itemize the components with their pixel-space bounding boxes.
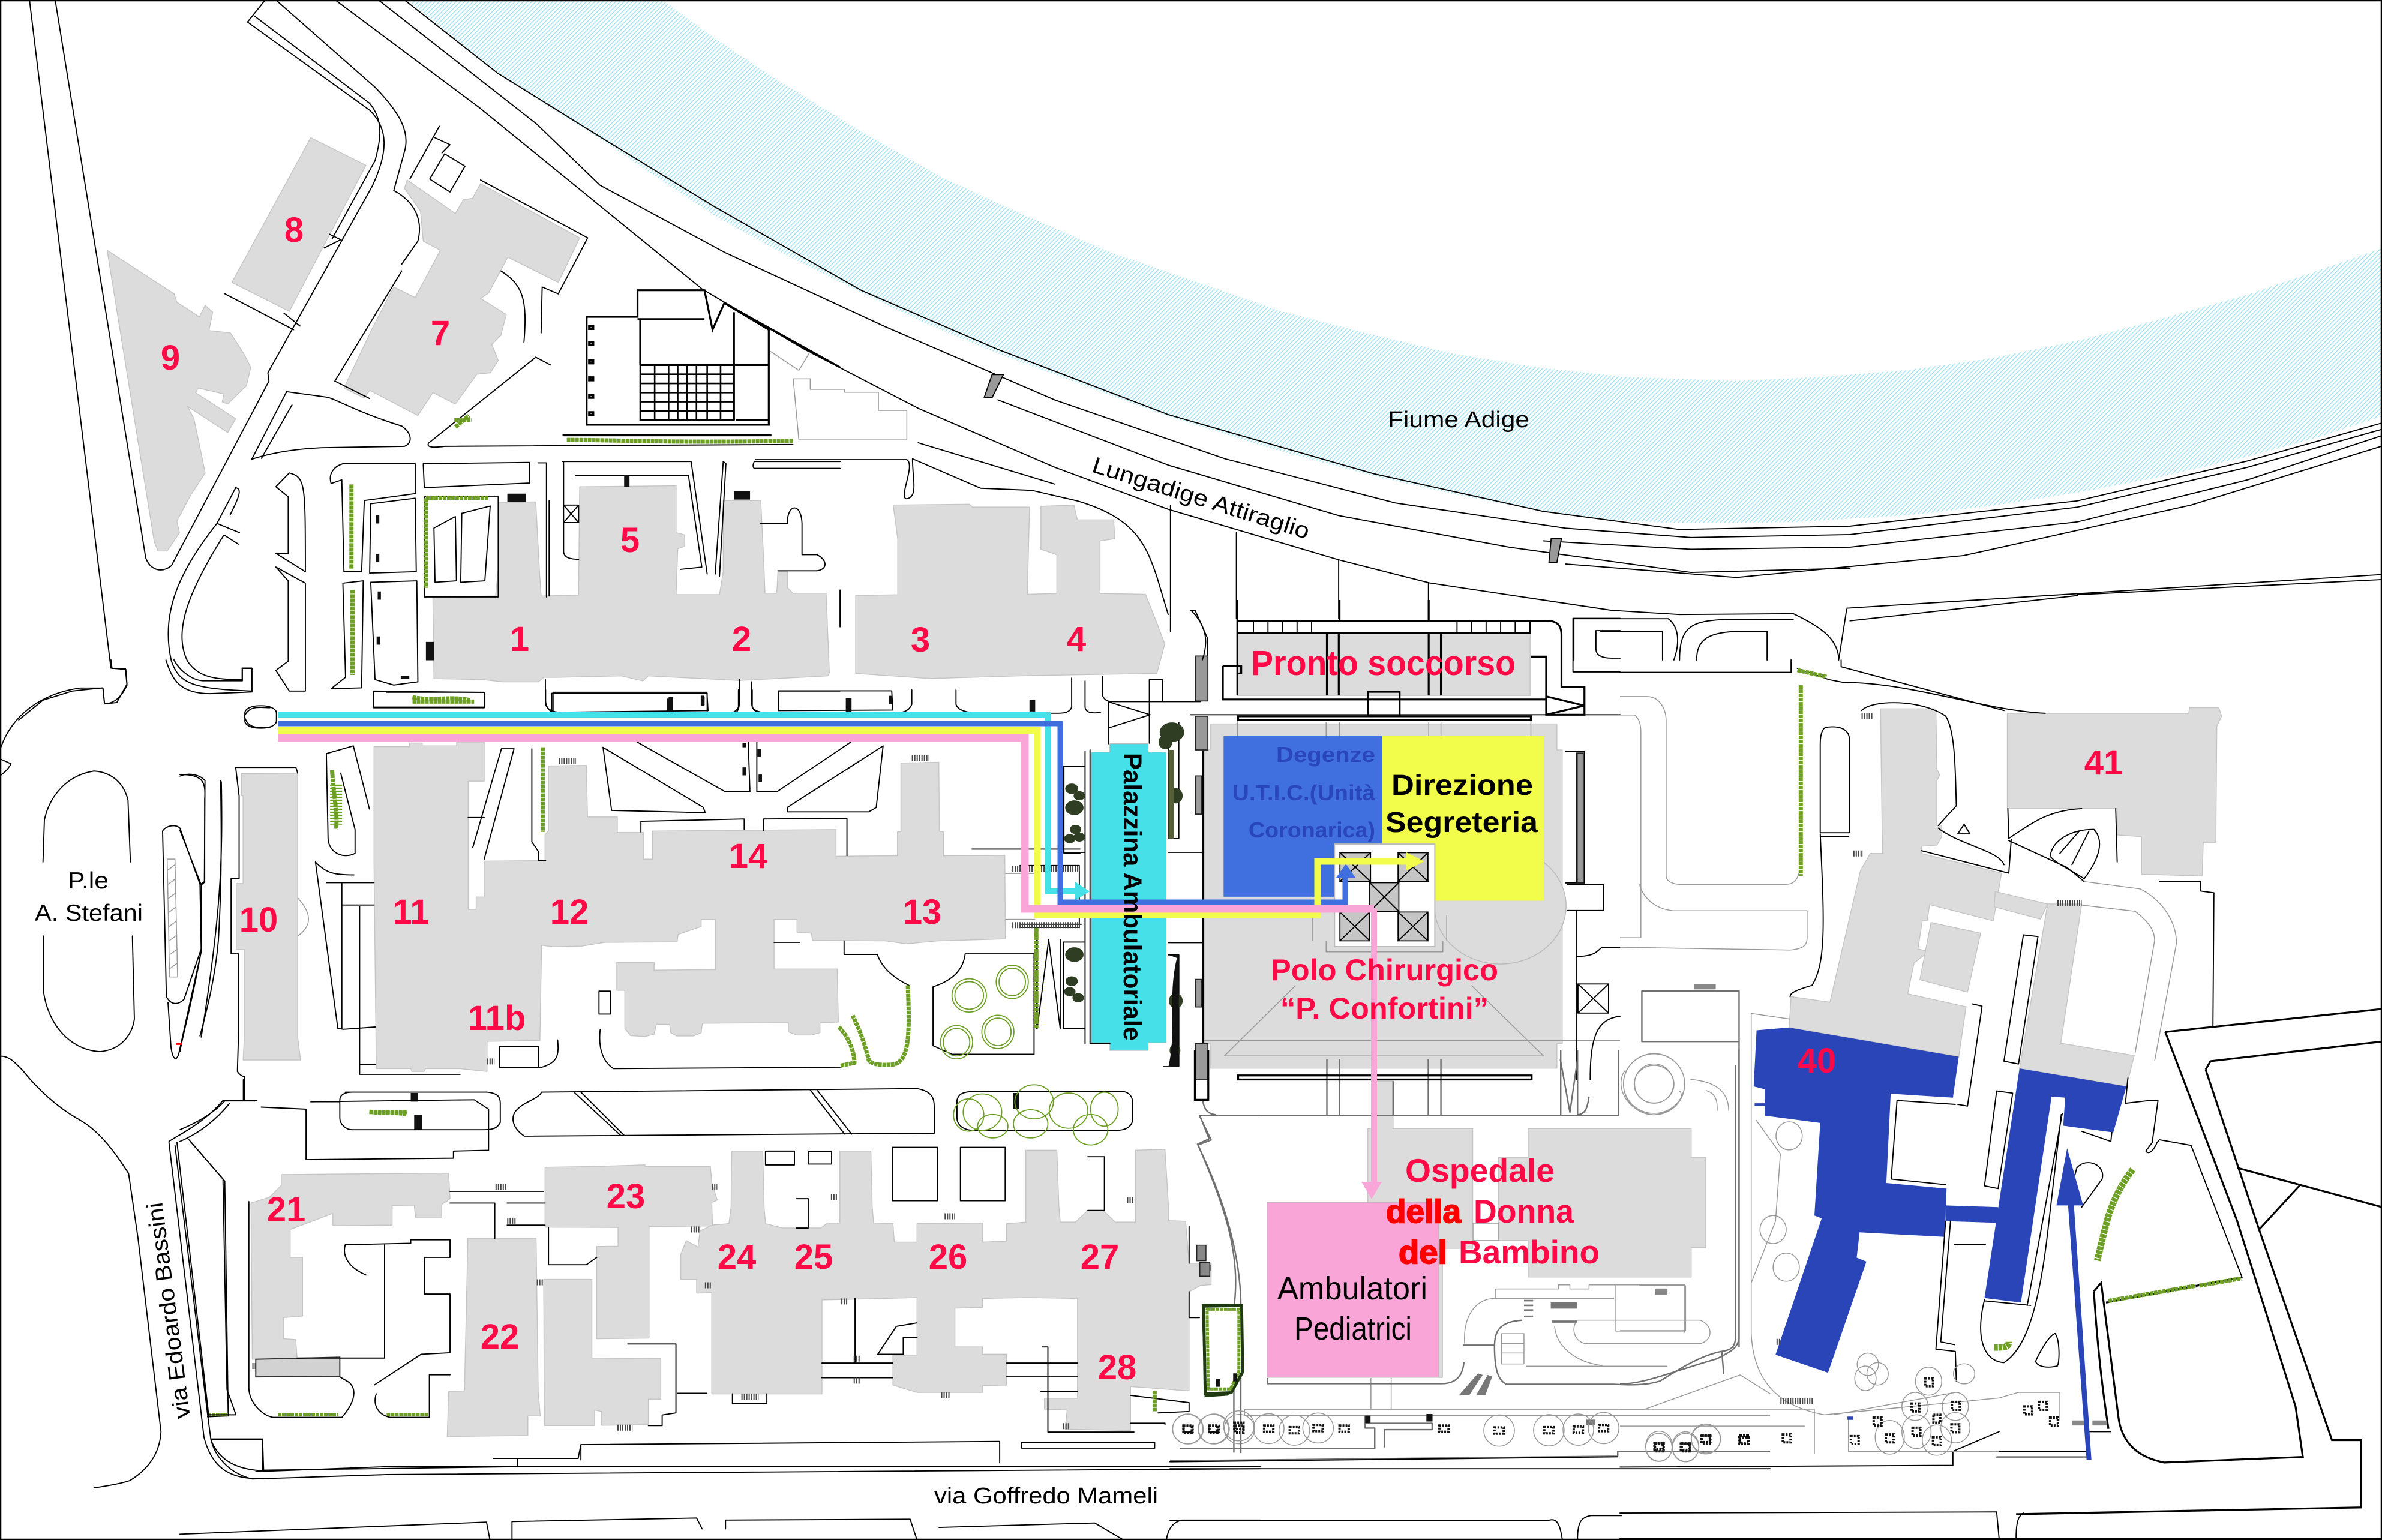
building numbers: 5 [620, 521, 640, 560]
label: Piazzale A. Stefani [35, 868, 143, 926]
thick plan edge [1195, 1050, 1532, 1100]
trees along via Mameli [1172, 1411, 1748, 1462]
label: Polo Chirurgico [1271, 953, 1498, 1025]
buildings 24 to 28 [681, 1149, 1211, 1431]
central west linework [180, 690, 1080, 1130]
yellow area: Direzione Segreteria [1382, 736, 1544, 901]
foot-bridges [984, 374, 1561, 563]
buildings 10 to 14 [236, 742, 1006, 1071]
building numbers: 1 [510, 620, 529, 659]
building: Pronto soccorso and Polo Chirurgico base [1020, 600, 1620, 1080]
tree circles [1624, 1054, 2058, 1461]
roof lines [1204, 721, 1620, 1056]
tree circles [953, 1085, 1118, 1145]
label: Degenze UTIC: U.T.I.C.(Unità [1232, 780, 1376, 805]
building numbers: 3 [911, 620, 930, 659]
coloured route: yellow to Direzione [278, 731, 1424, 915]
building 10 [236, 773, 301, 1060]
building numbers: 25 [794, 1238, 833, 1277]
building numbers: 40 [1798, 1041, 1836, 1080]
lower road lines [1620, 1431, 2382, 1538]
label: Ospedale della Donna e del Bambino: Ospedale [1405, 1152, 1555, 1189]
buildings north-west block: 1, 2, 5, 7, 8, 9 [107, 138, 829, 682]
label: Ambulatori Pediatrici: Pediatrici [1294, 1311, 1412, 1347]
building 7 [344, 180, 580, 416]
tree crowns [1172, 1415, 1255, 1444]
buildings 21 to 28 [251, 1149, 1211, 1436]
building 22 [447, 1238, 540, 1436]
east wing [2020, 904, 2134, 1086]
hedge and green dots [370, 1112, 1208, 1412]
label: Degenze UTIC [1232, 742, 1376, 842]
roads, courtyards and service blocks [180, 1080, 1260, 1540]
building 23 [545, 1165, 717, 1338]
blue bridge [1946, 1205, 1998, 1223]
villa outline [770, 352, 907, 440]
building 21 annex [256, 1357, 340, 1377]
round hall [1435, 848, 1566, 964]
building numbers: 10 [239, 900, 278, 939]
small blue marker [1754, 1103, 1853, 1420]
black outlined building [563, 290, 840, 436]
Ambulatori Pediatrici pink building [1267, 1202, 1439, 1377]
building 8 [232, 138, 366, 311]
label: Lungadige Attiraglio: Lungadige Attiraglio [1089, 453, 1313, 544]
river Adige [407, 0, 2382, 523]
grey dark markers [1459, 1289, 1667, 1425]
north-west linework [19, 0, 840, 720]
building numbers: 12 [550, 893, 589, 932]
central courtyard with lifts [1334, 844, 1435, 947]
building 40 blue highlighted part [1754, 1028, 1959, 1373]
roads and planters [180, 690, 1080, 1101]
building 21 [251, 1173, 450, 1359]
buildings 1, 2 and 5 [433, 486, 829, 682]
label: via Edoardo Bassini: via Edoardo Bassini [143, 1201, 196, 1420]
pavement edges [1170, 1345, 1770, 1461]
south-centre linework [1170, 1050, 1770, 1539]
grey service edges [1620, 991, 1739, 1384]
label: Polo Chirurgico: “P. Confortini” [1280, 992, 1489, 1025]
black marks [411, 696, 1035, 1130]
label: Ambulatori Pediatrici: Ambulatori [1277, 1271, 1427, 1307]
courtyard wing [1920, 923, 1981, 992]
building numbers: 14 [729, 837, 767, 876]
label: Direzione Segreteria: Segreteria [1385, 807, 1538, 839]
small grey boxes [1655, 984, 2107, 1425]
label: Polo Chirurgico: Polo Chirurgico [1271, 953, 1498, 987]
round columns [589, 326, 593, 415]
building 23 south wing [544, 1280, 661, 1425]
tree circles [940, 965, 1028, 1059]
building numbers: 22 [481, 1317, 519, 1356]
building numbers [161, 211, 2123, 1387]
polo chirurgico base lines [1198, 1050, 1739, 1453]
road and river-bank linework [335, 0, 2382, 660]
label: Degenze UTIC: Degenze [1276, 742, 1375, 767]
label: Direzione Segreteria [1385, 770, 1538, 839]
building numbers: 41 [2084, 743, 2123, 782]
label: Pronto soccorso: Pronto soccorso [1251, 644, 1516, 683]
label: Ospedale della Donna e del Bambino: della [1386, 1193, 1461, 1230]
label: Palazzina Ambulatoriale: Palazzina Ambulatoriale [1118, 753, 1147, 1041]
Palazzina Ambulatoriale cyan building [1091, 744, 1166, 1050]
blue area: Degenze UTIC [1223, 736, 1382, 897]
big blue arrow to building 40 [2056, 1148, 2092, 1460]
building numbers: 4 [1067, 620, 1086, 659]
small round at start of routes [245, 706, 277, 728]
stair hatch on corridor [487, 758, 1080, 1061]
west square linework [1, 660, 270, 1488]
label: via Goffredo Mameli: via Goffredo Mameli [934, 1484, 1158, 1509]
main roads and boundaries [1620, 660, 2242, 1381]
lower street kerbs [1170, 1457, 1770, 1539]
east wing blue highlighted part [1985, 1068, 2126, 1302]
glazed roof grid [640, 365, 734, 420]
label: Ambulatori Pediatrici [1277, 1271, 1427, 1347]
gray road edge [1198, 1116, 1260, 1452]
Pronto soccorso linework [1223, 600, 1585, 716]
small black service blocks [376, 475, 750, 713]
label: Direzione Segreteria: Direzione [1391, 770, 1533, 801]
service area outlines [1244, 1070, 1770, 1416]
green planter [1204, 1305, 1243, 1394]
coloured route: cyan to Palazzina Ambulatoriale [278, 715, 1090, 900]
label: Piazzale A. Stefani: P.le [68, 868, 109, 894]
stair blocks [1195, 656, 1583, 1080]
building numbers: 24 [718, 1238, 756, 1277]
building numbers: 21 [267, 1190, 305, 1229]
trees beside Palazzina [1064, 722, 1184, 1067]
building numbers: 23 [607, 1177, 645, 1216]
label: Ospedale della Donna e del Bambino: Bambino [1459, 1233, 1600, 1271]
south-west linework [180, 1080, 1260, 1540]
building 9 [107, 250, 251, 551]
building numbers: 11b [468, 999, 526, 1038]
building numbers: 26 [929, 1238, 967, 1277]
Pronto soccorso block [1237, 633, 1530, 695]
building 40 upper part [1789, 709, 2002, 1056]
label: Ospedale della Donna e del Bambino: del [1399, 1233, 1447, 1271]
buildings 3 and 4 [856, 504, 1165, 679]
building numbers: 11 [392, 893, 430, 932]
east side linework [1620, 660, 2382, 1538]
label: Ospedale della Donna e del Bambino [1386, 1152, 1600, 1271]
green courtyard [1204, 1306, 1241, 1395]
hedges [332, 697, 1036, 1115]
building numbers: 2 [732, 620, 751, 659]
connecting corridor [1994, 891, 2048, 919]
label: Ospedale della Donna e del Bambino: Donna [1474, 1193, 1574, 1230]
label: Degenze UTIC: Coronarica) [1249, 818, 1375, 842]
dashed stair hatching [1777, 716, 2082, 1401]
hedges [1798, 670, 2241, 1301]
building numbers: 9 [161, 338, 180, 377]
label: Fiume Adige: Fiume Adige [1388, 407, 1529, 433]
building numbers: 7 [431, 314, 450, 353]
coloured route: blue to Degenze UTIC [278, 724, 1355, 902]
roads and islands [19, 0, 840, 720]
building numbers: 28 [1098, 1348, 1136, 1387]
stair marks [253, 1187, 1211, 1428]
building 41 [2008, 708, 2222, 876]
building numbers: 8 [284, 211, 304, 250]
building numbers: 27 [1081, 1238, 1119, 1277]
coloured route: pink to Ambulatori Pediatrici [278, 738, 1382, 1199]
building numbers: 13 [903, 893, 941, 932]
label: Piazzale A. Stefani: A. Stefani [35, 900, 143, 926]
Lungadige lines [404, 0, 2382, 529]
hedges [352, 416, 793, 701]
buildings 40 and 41 [1754, 708, 2222, 1373]
Polo Chirurgico block [1204, 724, 1562, 1068]
building: Ospedale della Donna e del Bambino [1368, 1081, 1706, 1377]
buildings 11, 11b, 12, 13, 14 [374, 742, 1006, 1071]
